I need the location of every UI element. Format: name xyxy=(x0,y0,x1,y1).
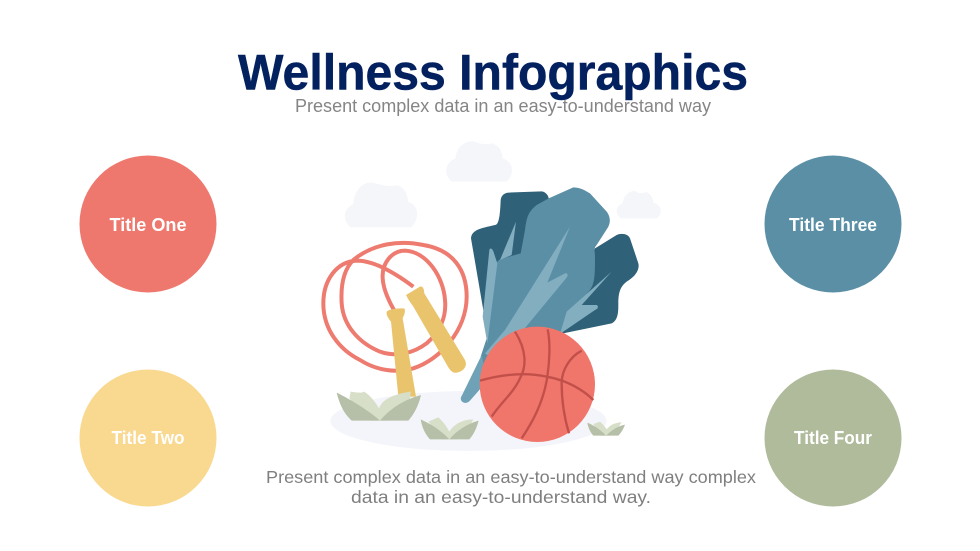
panel: title three circle xyxy=(764,156,902,292)
subtitle: Present complex data in an easy-to-understand way xyxy=(295,96,711,116)
icon: leaf stem xyxy=(461,355,487,403)
panel: title one circle xyxy=(80,156,216,292)
illustration upper layer xyxy=(323,141,661,403)
body text: data in an easy-to-understand way. xyxy=(351,487,651,507)
icon: basketball xyxy=(480,327,595,442)
icon: rope handle left xyxy=(387,308,416,397)
ground ellipse xyxy=(330,391,606,451)
panel: title four circle: Title Four xyxy=(794,428,872,448)
icon: dark leaf back xyxy=(471,191,549,343)
icon: grass middle xyxy=(421,417,479,439)
panel: title two circle: Title Two xyxy=(112,428,184,448)
icon: dark leaf right xyxy=(560,234,639,334)
icon: cloud left xyxy=(345,183,417,227)
panel: title three circle: Title Three xyxy=(789,215,877,235)
icon: grass right xyxy=(587,422,625,436)
icon: rope handle right xyxy=(406,287,466,373)
panel: title one circle: Title One xyxy=(110,215,186,235)
title: Wellness Infographics xyxy=(238,44,748,100)
icon: jump rope xyxy=(323,243,467,371)
icon: cloud center xyxy=(446,141,512,182)
illustration: wellness scene xyxy=(323,141,661,451)
body text xyxy=(266,467,756,507)
body text: Present complex data in an easy-to-understand way complex xyxy=(266,467,756,487)
icon: leaf highlights xyxy=(483,222,612,363)
icon: grass large xyxy=(337,392,421,421)
panel: title four circle xyxy=(764,370,902,506)
illustration lower layer xyxy=(337,327,625,442)
panel: title two circle xyxy=(80,370,216,506)
icon: main leaf xyxy=(481,187,610,383)
icon: cloud right xyxy=(617,191,661,218)
